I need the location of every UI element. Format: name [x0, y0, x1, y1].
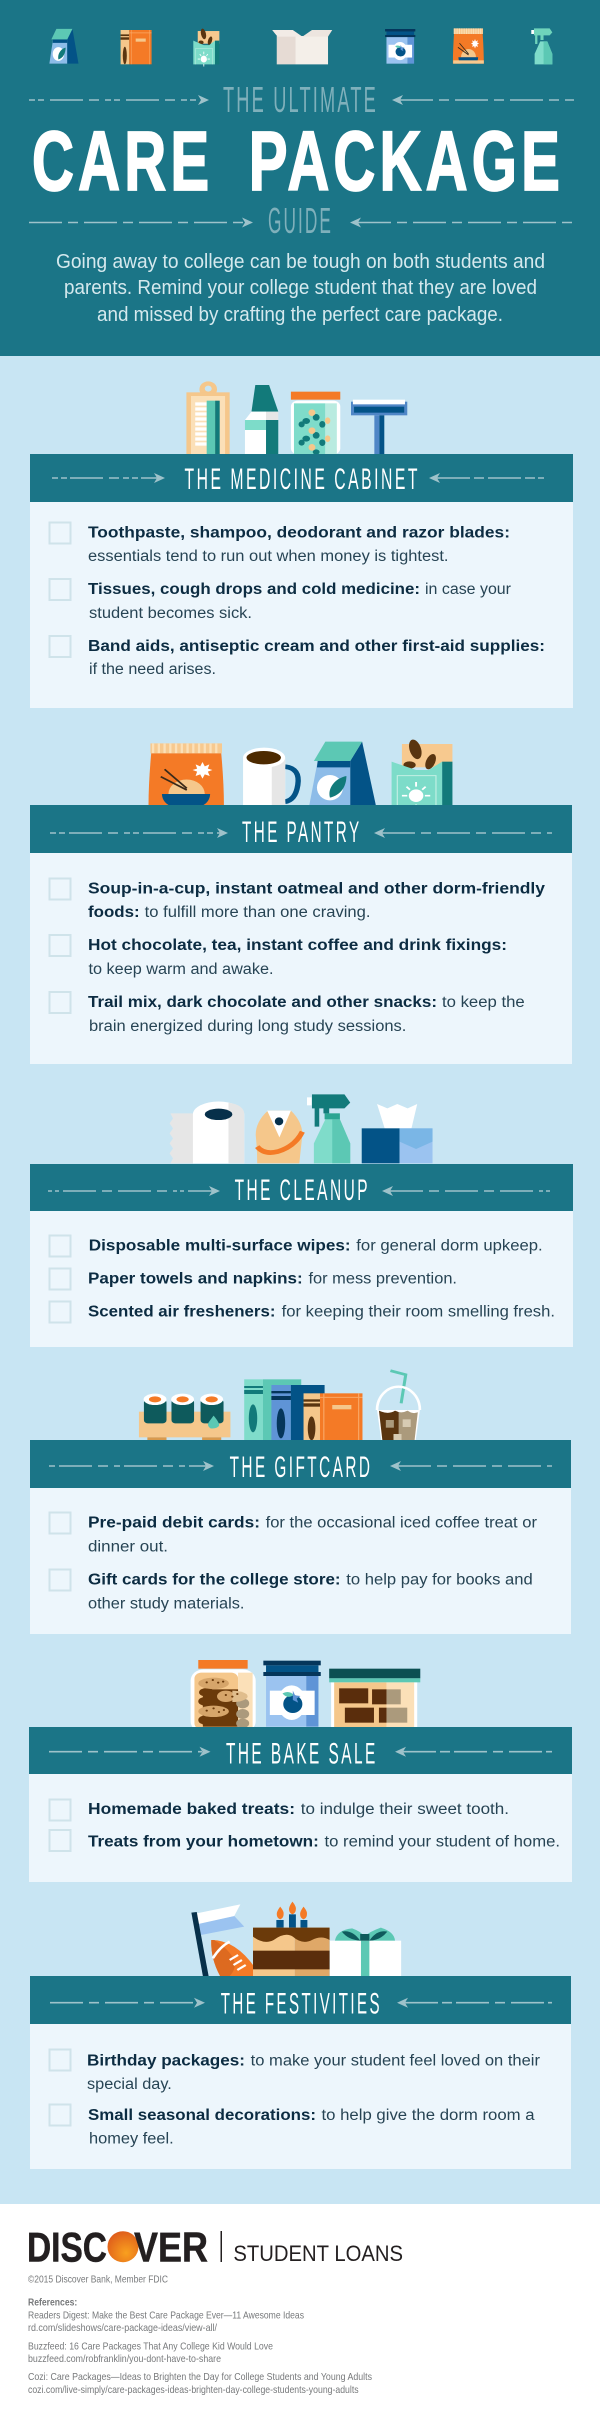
- icon: iced coffee: [377, 1371, 420, 1440]
- arrow: guide right: [350, 218, 573, 228]
- checklist: Homemade baked treats:: [88, 1801, 295, 1818]
- icon: flag: [191, 1904, 244, 1976]
- checklist: to fulfill more than one craving.: [145, 904, 370, 921]
- card: [30, 2024, 571, 2169]
- checklist: Disposable multi-surface wipes:: [89, 1238, 351, 1255]
- checklist: [50, 878, 545, 1035]
- checklist: to keep warm and awake.: [88, 961, 274, 978]
- icons: toiletries: [186, 381, 407, 455]
- intro text: [56, 251, 545, 326]
- panel: the medicine cabinet: [30, 381, 573, 708]
- icons: cleaning items: [170, 1094, 433, 1163]
- logo: discover student loans: STUDENT LOANS: [233, 2241, 403, 2266]
- card: [30, 1211, 573, 1347]
- intro text: parents. Remind your college student that they are loved: [64, 277, 537, 299]
- checklist: Birthday packages:: [87, 2052, 245, 2069]
- heading bar: THE CLEANUP: [235, 1174, 370, 1207]
- logo: discover student loans: VER: [134, 2224, 208, 2271]
- checklist: in case your: [425, 581, 511, 598]
- panel: the giftcard: [30, 1371, 571, 1634]
- heading bar: THE PANTRY: [242, 816, 362, 849]
- heading bar: [30, 1164, 573, 1211]
- icon: mug: [243, 748, 298, 805]
- icon: spray bottle: [307, 1094, 350, 1163]
- checklist: for keeping their room smelling fresh.: [282, 1303, 555, 1320]
- heading bar: [30, 1440, 571, 1488]
- intro text: and missed by crafting the perfect care package.: [97, 304, 503, 326]
- checklist: for general dorm upkeep.: [356, 1238, 543, 1255]
- icon: trail mix: [193, 28, 219, 67]
- header panel: GUIDE: [268, 200, 333, 241]
- checklist: Gift cards for the college store:: [88, 1571, 341, 1588]
- checklist: to indulge their sweet tooth.: [301, 1801, 509, 1818]
- references: rd.com/slideshows/care-package-ideas/view-all/: [28, 2322, 217, 2334]
- checklist: to keep the: [442, 994, 525, 1011]
- references: cozi.com/live-simply/care-packages-ideas-brighten-day-college-students-young-adults: [28, 2384, 359, 2396]
- checklist: to make your student feel loved on their: [251, 2052, 540, 2069]
- header panel: [0, 0, 600, 356]
- checklist: special day.: [87, 2076, 172, 2093]
- icon: cookie jar: [191, 1660, 256, 1733]
- title line 1: THE ULTIMATE: [223, 79, 378, 120]
- icon: pill jar: [291, 392, 340, 455]
- checklist: Band aids, antiseptic cream and other first-aid supplies:: [88, 638, 545, 655]
- icon: soup packet: [149, 743, 224, 805]
- intro text: Going away to college can be tough on both students and: [56, 251, 545, 273]
- icons: pantry items: [149, 738, 452, 809]
- icon row: [49, 28, 552, 67]
- icons: baked goods: [191, 1660, 420, 1733]
- checklist: to remind your student of home.: [324, 1834, 560, 1851]
- checklist: Toothpaste, shampoo, deodorant and razor blades:: [88, 524, 510, 541]
- checklist: Scented air fresheners:: [88, 1303, 276, 1320]
- icon: soup packet: [453, 28, 484, 64]
- card: [30, 1488, 571, 1634]
- checklist: [50, 1800, 560, 1851]
- heading bar: [30, 454, 573, 502]
- checklist: [50, 1236, 555, 1322]
- checklist: to help pay for books and: [346, 1571, 533, 1588]
- icon: toothbrush: [186, 381, 230, 454]
- icon: trail mix: [392, 738, 452, 809]
- checklist: dinner out.: [88, 1539, 168, 1556]
- checklist: Soup-in-a-cup, instant oatmeal and other dorm-friendly: [88, 880, 545, 897]
- checklist: [50, 1512, 537, 1613]
- card: [29, 1774, 572, 1882]
- arrow: ultimate right: [392, 95, 574, 105]
- heading bar: [30, 805, 572, 853]
- icon: toothpaste: [245, 385, 278, 454]
- checklist: Hot chocolate, tea, instant coffee and drink fixings:: [88, 937, 507, 954]
- icon: cake: [253, 1902, 330, 1976]
- checklist: Tissues, cough drops and cold medicine:: [88, 581, 420, 598]
- icon: books: [121, 30, 152, 64]
- checklist: Paper towels and napkins:: [88, 1271, 303, 1288]
- heading bar: THE FESTIVITIES: [221, 1988, 382, 2021]
- arrow: guide left: [29, 218, 253, 228]
- checklist: essentials tend to run out when money is tightest.: [88, 548, 448, 565]
- checklist: to help give the dorm room a: [322, 2107, 535, 2124]
- icon: tea bag: [49, 29, 78, 64]
- panel: the pantry: [30, 738, 572, 1064]
- references: [28, 2296, 372, 2396]
- icon: football: [211, 1940, 260, 1976]
- icon: tissue box: [362, 1104, 433, 1163]
- icon: spray bottle: [531, 28, 552, 64]
- references: References:: [28, 2296, 77, 2308]
- heading bar: [29, 1727, 572, 1774]
- references: buzzfeed.com/robfranklin/you-dont-have-to-share: [28, 2353, 221, 2365]
- heading bar: [30, 1976, 571, 2024]
- card: [30, 853, 572, 1064]
- checklist: [50, 2050, 540, 2148]
- checklist: if the need arises.: [89, 661, 216, 678]
- icon: open box: [272, 30, 332, 64]
- checklist: [50, 522, 545, 678]
- checklist: brain energized during long study sessions.: [89, 1018, 406, 1035]
- checklist: other study materials.: [88, 1596, 245, 1613]
- icon: paper towels: [170, 1101, 244, 1163]
- references: Cozi: Care Packages—Ideas to Brighten the Day for College Students and Young Adults: [28, 2371, 372, 2383]
- checklist: Pre-paid debit cards:: [88, 1515, 260, 1532]
- icon: air freshener: [256, 1111, 302, 1163]
- icon: jam jar: [263, 1661, 321, 1727]
- icon: razor: [351, 400, 407, 454]
- panel: the festivities: [30, 1902, 571, 2169]
- logo: discover student loans: DISC: [27, 2224, 107, 2271]
- icon: brownie container: [329, 1669, 420, 1730]
- checklist: for the occasional iced coffee treat or: [266, 1515, 537, 1532]
- heading bar: THE BAKE SALE: [226, 1737, 378, 1770]
- panel: the cleanup: [30, 1094, 573, 1347]
- references: Readers Digest: Make the Best Care Package Ever—11 Awesome Ideas: [28, 2309, 304, 2321]
- footer: [0, 2204, 600, 2423]
- logo: discover student loans: O: [108, 2224, 138, 2271]
- icon: books: [244, 1379, 362, 1440]
- checklist: homey feel.: [89, 2131, 174, 2148]
- icons: gift items: [139, 1371, 420, 1440]
- icon: jam jar: [385, 29, 415, 64]
- arrow: ultimate left: [29, 95, 209, 105]
- copyright: ©2015 Discover Bank, Member FDIC: [28, 2273, 168, 2285]
- checklist: for mess prevention.: [308, 1271, 457, 1288]
- heading bar: THE GIFTCARD: [230, 1451, 372, 1484]
- references: Buzzfeed: 16 Care Packages That Any College Kid Would Love: [28, 2340, 273, 2352]
- checklist: foods:: [88, 904, 140, 921]
- checklist: Small seasonal decorations:: [88, 2107, 316, 2124]
- icons: party items: [191, 1902, 401, 1976]
- checklist: Trail mix, dark chocolate and other snacks:: [88, 994, 437, 1011]
- card: [30, 502, 573, 708]
- icon: gift: [330, 1928, 401, 1976]
- logo: discover student loans: [27, 2224, 403, 2271]
- icon: sushi tray: [139, 1394, 230, 1440]
- checklist: student becomes sick.: [89, 605, 252, 622]
- panel: the bake sale: [29, 1660, 572, 1882]
- checklist: Treats from your hometown:: [88, 1834, 319, 1851]
- icon: tea bag: [309, 742, 376, 805]
